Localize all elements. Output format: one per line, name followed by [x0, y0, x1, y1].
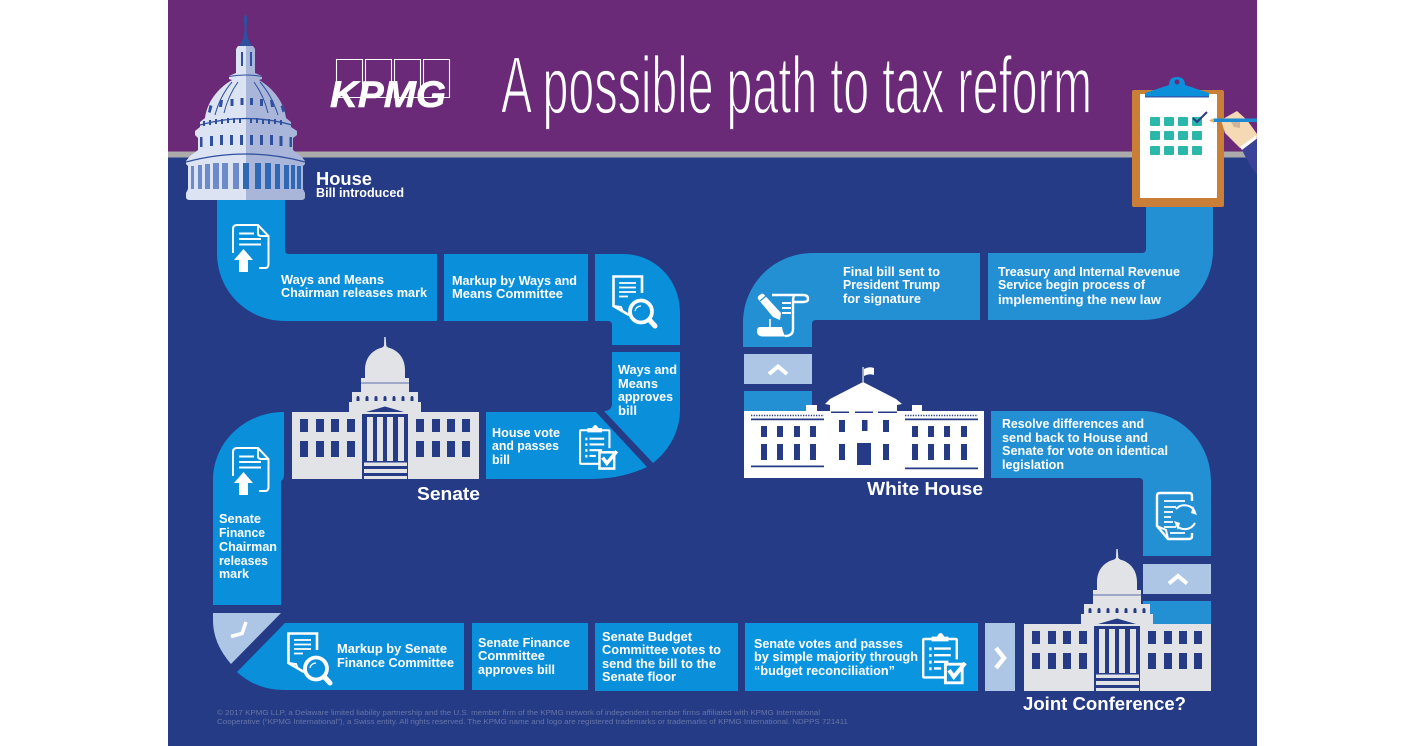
- hand and pencil: [1209, 111, 1257, 175]
- path: Senate Finance Chairman releases mark: Finance: [219, 525, 265, 540]
- icon: document refresh: [1157, 493, 1197, 539]
- path: Final bill sent to President Trump: Final bill sent to: [843, 264, 940, 279]
- path: Treasury and IRS: Service begin process of: [998, 277, 1146, 292]
- label: Senate: Senate: [417, 484, 480, 504]
- icon: clipboard check 2: [923, 633, 965, 683]
- text: Ways and Means Chairman: Ways and Means: [281, 272, 384, 287]
- arrow: up chevron left column: [744, 354, 812, 384]
- arrow: corner chevron: [213, 613, 281, 664]
- path: Senate Finance Chairman releases mark: mark: [219, 566, 250, 581]
- path: House vote and passes bill: bill: [492, 452, 510, 467]
- path: Senate Finance Chairman releases mark: [213, 412, 284, 605]
- label: White House: White House: [867, 479, 983, 499]
- icon: clipboard check: [580, 425, 617, 469]
- path: Resolve differences: legislation: [1002, 457, 1064, 472]
- path: House vote and passes bill: and passes: [492, 438, 559, 453]
- header band: [168, 0, 1257, 152]
- label: House, Bill introduced: House: [316, 169, 372, 189]
- path: connector above Joint Conference: [1143, 601, 1211, 631]
- icon: Capitol dome (House): [186, 14, 305, 200]
- path: Ways and Means approves bill: bill: [618, 403, 637, 418]
- icon: clipboard with calendar: [1132, 77, 1257, 207]
- KPMG logo: [330, 60, 450, 115]
- arrow: up chevron right column: [1143, 564, 1211, 594]
- path: Senate Budget Committee: Senate Budget: [602, 629, 693, 644]
- path: Ways and Means approves bill: [604, 352, 680, 463]
- path: Senate Budget Committee: send the bill to the: [602, 656, 716, 671]
- building: Joint Conference capitol: [1024, 549, 1211, 691]
- path: Resolve differences: send back to House and: [1002, 430, 1148, 445]
- path: Final bill sent to President Trump: [743, 253, 980, 347]
- icon: scroll and quill: [757, 294, 808, 336]
- path: Senate Finance Committee approves bill: Committee: [478, 648, 545, 663]
- path: Treasury and IRS: [988, 200, 1213, 320]
- path: House vote and passes bill: House vote: [492, 425, 560, 440]
- icon: document upload 2: [233, 448, 268, 495]
- path: Senate Finance Committee approves bill: [472, 623, 588, 690]
- path: Senate Budget Committee: Senate floor: [602, 669, 676, 684]
- path: Senate Budget Committee: Committee votes to: [602, 642, 721, 657]
- path: House vote and passes bill: [486, 412, 647, 479]
- building: White House: [744, 367, 984, 478]
- path: Markup by Senate Finance Committee: Finance Committee: [337, 655, 454, 670]
- path: Senate votes and passes: “budget reconciliation”: [754, 663, 895, 678]
- path: Resolve differences: Resolve differences and: [1002, 416, 1144, 431]
- text: Ways and Means Chairman: Chairman releases mark: [281, 285, 428, 300]
- path: Senate Finance Chairman releases mark: releases: [219, 553, 268, 568]
- icon: document upload: [233, 225, 268, 272]
- icon: document with magnifier 2: [288, 634, 330, 683]
- path: House segment 1, Ways and Means Chairman releases mark: [217, 195, 437, 321]
- path: Treasury and IRS: implementing the new law: [998, 292, 1162, 307]
- path: Senate votes and passes: by simple majority through: [754, 649, 918, 664]
- path: curve with review icon: [595, 254, 680, 345]
- path: Markup by Senate Finance Committee: Markup by Senate: [337, 641, 447, 656]
- path: Senate votes and passes: [745, 623, 978, 691]
- path: Final bill sent to President Trump: President Trump: [843, 277, 940, 292]
- path: Markup by Ways and Means Committee: Means Committee: [452, 286, 563, 301]
- background: navy board: [168, 0, 1257, 746]
- path: Ways and Means approves bill: approves: [618, 389, 673, 404]
- path: Senate Budget Committee: [595, 623, 738, 691]
- path: Senate Finance Committee approves bill: Senate Finance: [478, 635, 570, 650]
- label: House, Bill introduced: [316, 169, 404, 200]
- path: Ways and Means approves bill: Means: [618, 376, 658, 391]
- arrow: right chevron: [985, 623, 1015, 691]
- footer legal text: Cooperative (“KPMG International”), a Swiss entity. All rights reserved. The KPMG name and logo are registered trademarks or trademarks of KPMG International. NDPPS 721411: [217, 717, 848, 726]
- path: Markup by Ways and Means Committee: Markup by Ways and: [452, 273, 577, 288]
- path: Resolve differences: [991, 411, 1211, 556]
- label: Joint Conference: Joint Conference?: [1023, 694, 1186, 714]
- label: House, Bill introduced: Bill introduced: [316, 185, 404, 200]
- path: Resolve differences: Senate for vote on identical: [1002, 443, 1168, 458]
- path: Markup by Senate Finance Committee: [237, 623, 464, 690]
- flag: [862, 367, 874, 382]
- path: Senate Finance Committee approves bill: approves bill: [478, 662, 555, 677]
- path: Final bill sent to President Trump: for signature: [843, 291, 921, 306]
- path: Treasury and IRS: Treasury and Internal Revenue: [998, 264, 1180, 279]
- KPMG logo: KPMG: [330, 74, 446, 115]
- checklist squares: [1150, 117, 1202, 155]
- footer legal text: © 2017 KPMG LLP, a Delaware limited liability partnership and the U.S. member firm of the KPMG network of independent member firms affiliated with KPMG International: [217, 708, 820, 717]
- path: Markup by Ways and Means Committee: [444, 254, 588, 321]
- path: connector above White House: [744, 391, 812, 419]
- path: Senate votes and passes: Senate votes and passes: [754, 636, 903, 651]
- footer legal text: [217, 708, 848, 726]
- icon: document with magnifier: [614, 276, 655, 326]
- path: Senate Finance Chairman releases mark: Chairman: [219, 539, 277, 554]
- building: Senate capitol: [292, 337, 479, 479]
- path: Senate Finance Chairman releases mark: Senate: [219, 511, 261, 526]
- path: Ways and Means approves bill: Ways and: [618, 362, 677, 377]
